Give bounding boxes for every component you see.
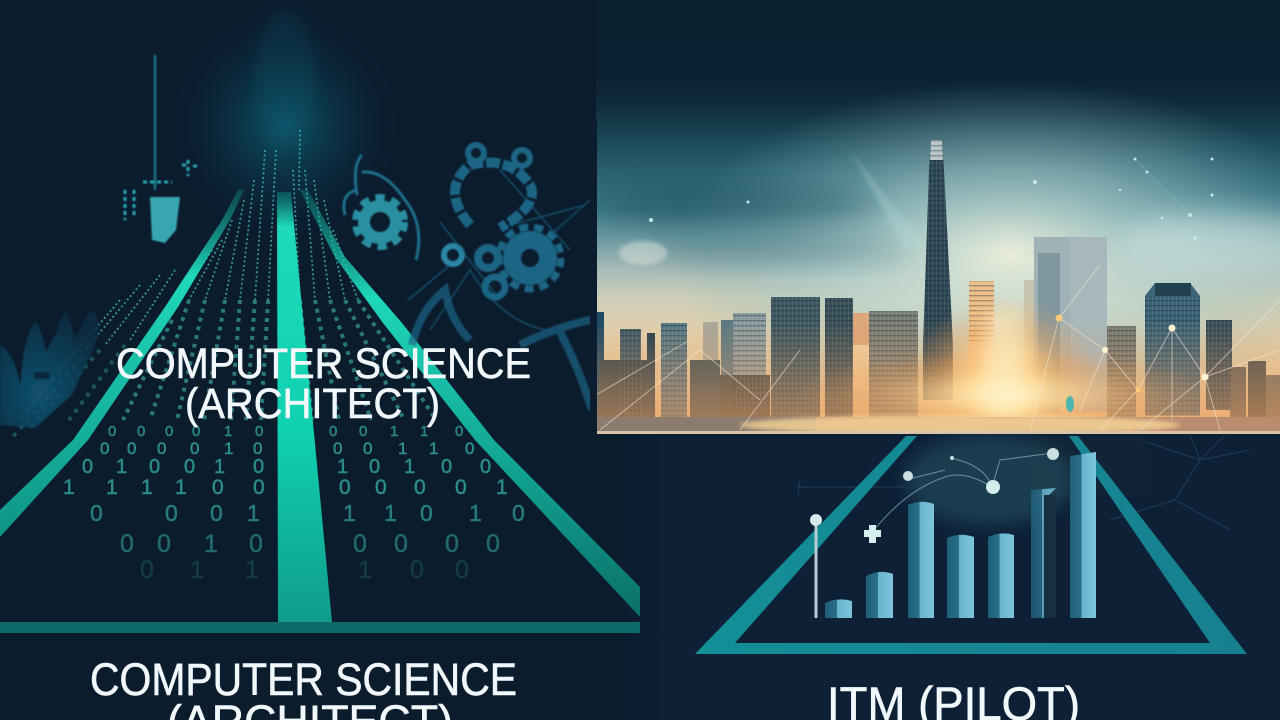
- binary digits near field: 01001010100: [82, 456, 491, 478]
- bar chart: [810, 452, 1096, 618]
- network lines over city: [596, 265, 1280, 430]
- binary digits near field: 00001000110: [100, 439, 474, 458]
- left perspective stripe: [0, 190, 244, 537]
- icon: audience silhouettes: [0, 312, 99, 428]
- binary digits near field: 011100: [140, 556, 469, 584]
- binary digits near field: 00100000: [120, 530, 500, 558]
- teal triangle frame: [695, 436, 1247, 654]
- window texture: [620, 281, 1232, 423]
- teal light beam at horizon: [165, 5, 405, 245]
- binary digits near field: [63, 423, 525, 584]
- panel: computer science path: [0, 5, 640, 633]
- binary digits near field: 000111010: [90, 500, 525, 526]
- heading: computer science overlay: (ARCHITECT): [185, 380, 440, 428]
- pin marker: [810, 514, 822, 618]
- faint network background: [795, 435, 1250, 530]
- icon: gear network: [408, 145, 600, 410]
- sky: [596, 70, 1280, 434]
- horizontal base bar: [0, 622, 640, 633]
- icon: small gear: [344, 155, 419, 260]
- binary streams far distance: [10, 130, 436, 440]
- binary digits near field: 00001000110: [108, 423, 463, 440]
- right perspective stripe: [300, 190, 640, 617]
- distant buildings: [596, 237, 1280, 423]
- stars: [649, 158, 1214, 240]
- panel: ITM pilot chart: [695, 435, 1250, 654]
- heading: computer science overlay: COMPUTER SCIENCE: [116, 340, 531, 388]
- icon: robot arm: [125, 55, 199, 243]
- warm light overlay: [597, 300, 1280, 417]
- waterfront band: [596, 396, 1280, 435]
- bars: [825, 452, 1096, 618]
- centre perspective stripe: [277, 192, 332, 622]
- central tower: [923, 140, 953, 400]
- glowing network nodes: [1056, 314, 1208, 392]
- trend curve with nodes: [864, 448, 1059, 543]
- glow behind chart: [905, 435, 1075, 525]
- dark edge of city panel: [590, 120, 597, 435]
- binary digits near field: 11110000001: [63, 476, 508, 499]
- heading: computer science: COMPUTER SCIENCE: [90, 654, 517, 705]
- heading: computer science overlay: [116, 340, 531, 428]
- panel: city skyline: [596, 86, 1280, 434]
